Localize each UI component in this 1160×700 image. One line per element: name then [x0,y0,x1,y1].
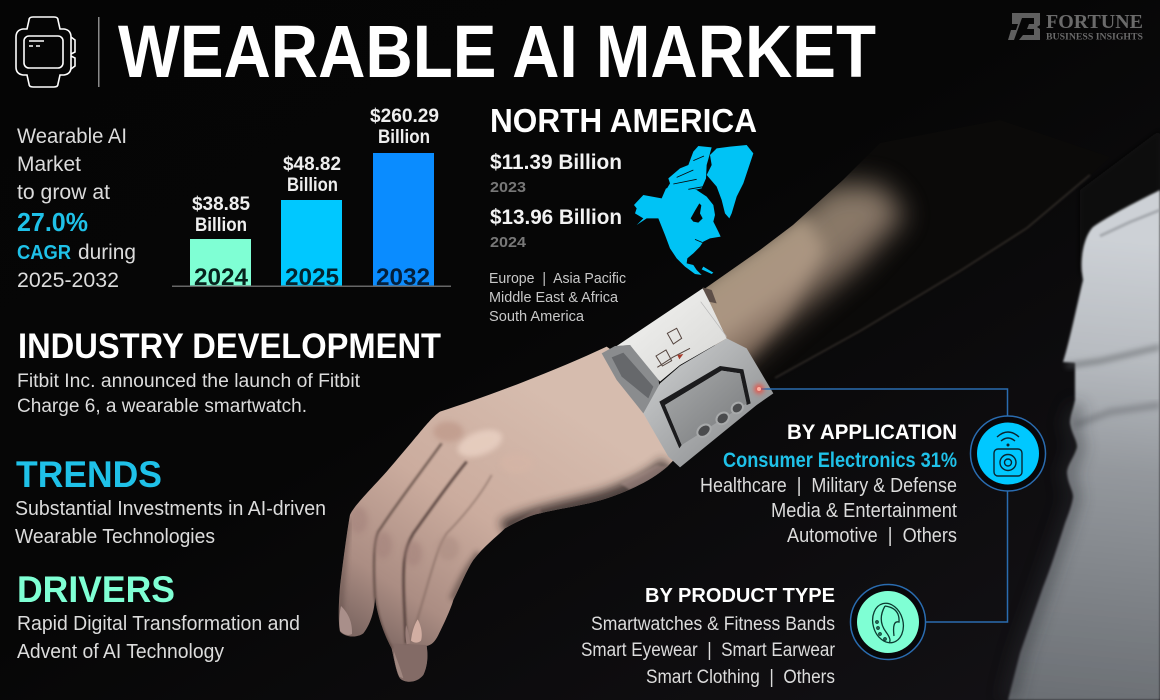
photo: forearm [703,162,1090,379]
other regions: Middle East & Africa [489,289,619,306]
fingernails [339,606,352,635]
band logo [656,328,690,367]
knuckle highlights [457,429,502,458]
photo: hand [339,347,683,682]
other regions [489,270,626,325]
panel: Industry Development: INDUSTRY DEVELOPMENT [18,327,441,366]
bar: 2025: Billion [287,175,338,196]
bar: 2032: Billion [378,127,430,148]
panel: Drivers: DRIVERS [17,569,175,610]
values: $13.96 Billion [490,206,622,229]
text: CAGR summary: during [78,241,136,264]
panel: By Application [700,421,957,547]
panel: North America [489,102,757,325]
top plate [617,288,727,382]
text: CAGR summary: to grow at [17,181,110,204]
other regions: South America [489,308,585,325]
icon: wireless device [970,416,1046,491]
bar: 2024 [190,194,251,291]
panel: Drivers: Advent of AI Technology [17,641,224,663]
text: CAGR summary [17,125,136,292]
photo: smart wrist band [602,287,773,467]
values: 2023 [490,179,526,196]
wrist crease [620,465,667,490]
logo: Fortune Business Insights: FORTUNE [1046,11,1143,33]
title divider [98,17,100,87]
icon: smartwatch [16,17,75,87]
text: CAGR summary: Market [17,153,81,176]
panel: Trends [15,454,326,548]
bar: 2024: $38.85 [192,194,250,215]
text: CAGR summary: CAGR [17,242,72,264]
panel: By Application: Automotive | Others [787,525,957,547]
finger gaps [374,443,442,648]
band side [602,345,660,413]
values [490,151,622,251]
title: WEARABLE AI MARKET [118,10,876,93]
panel: By Product Type: Smart Eyewear | Smart Earwear [581,640,836,661]
bar: 2025 [281,154,342,291]
bar: 2032: $260.29 [370,106,439,127]
text: CAGR summary: Wearable AI [17,125,127,148]
bar: 2025: $48.82 [283,154,341,175]
perforations [695,400,745,439]
bar chart: market size [172,106,451,291]
panel: Trends: Substantial Investments in AI-driven [15,498,326,520]
text: CAGR summary: 2025-2032 [17,269,119,292]
other regions: Europe | Asia Pacific [489,270,626,287]
panel: Industry Development: Fitbit Inc. announced the launch of Fitbit [17,371,361,392]
panel: Trends: TRENDS [16,454,162,495]
panel: By Application: Media & Entertainment [771,500,957,522]
panel: By Application: BY APPLICATION [787,421,957,444]
panel: Drivers [17,569,300,663]
bar: 2024: Billion [195,215,247,236]
bar: 2024: 2024 [194,264,249,291]
bar: 2032 [370,106,439,291]
values: 2024 [490,234,527,251]
icon: fitness band [850,584,926,660]
panel: By Product Type: Smart Clothing | Others [646,667,835,688]
bar: 2025: 2025 [285,264,339,291]
connector line [760,389,1008,622]
wrist underside shadow [505,467,670,532]
map: North America [634,145,753,275]
panel: By Product Type: BY PRODUCT TYPE [645,584,835,607]
panel: By Application: Consumer Electronics 31% [723,449,957,472]
panel: Trends: Wearable Technologies [15,526,215,548]
panel: Industry Development: Charge 6, a wearable smartwatch. [17,396,307,417]
panel: Drivers: Rapid Digital Transformation and [17,613,300,635]
photo: white sleeve [1008,130,1160,700]
text: CAGR summary: 27.0% [17,207,88,237]
bar: 2032: 2032 [376,264,430,291]
band strap top [703,287,717,303]
lower metal [643,338,773,467]
hand silhouette [339,347,683,682]
indicator: red light [754,384,764,394]
panel: By Application: Healthcare | Military & Defense [700,475,957,497]
lowest finger [388,643,427,682]
heading: NORTH AMERICA [490,102,757,139]
values: $11.39 Billion [490,151,622,174]
shaded left sides of fingers [340,520,348,632]
logo: Fortune Business Insights [1008,11,1143,42]
panel: By Product Type [581,584,836,688]
logo: Fortune Business Insights: BUSINESS INSIGHTS [1046,32,1143,42]
panel: By Product Type: Smartwatches & Fitness Bands [591,614,835,635]
panel: Industry Development [17,327,441,417]
